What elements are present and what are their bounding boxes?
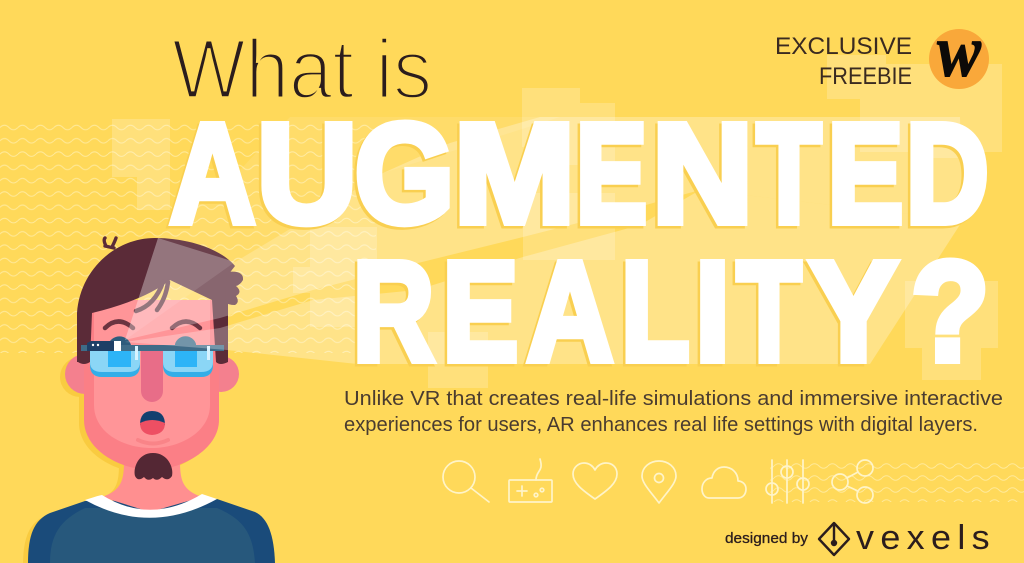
exclusive freebie text: FREEBIE	[819, 63, 912, 90]
heading: AUGMENTED: M	[454, 94, 575, 252]
headline shadow: T	[754, 96, 819, 254]
description text: Unlike VR that creates real-life simulations and immersive interactive	[344, 387, 1003, 410]
headline shadow: U	[254, 96, 354, 254]
headline shadow: A	[524, 234, 610, 392]
heading: AUGMENTED: E	[828, 94, 903, 252]
title: What is: What is	[172, 22, 432, 116]
headline shadow: N	[650, 96, 750, 254]
headline shadow: E	[825, 96, 901, 254]
heading: REALITY?: Y	[810, 232, 897, 390]
logo badge: w	[937, 11, 982, 93]
heading: AUGMENTED: T	[757, 94, 821, 252]
icon: gamepad	[509, 459, 552, 502]
heading: REALITY?: A	[527, 232, 613, 390]
icon: cloud	[702, 467, 746, 498]
exclusive freebie text: EXCLUSIVE	[775, 33, 912, 60]
heading: AUGMENTED: A	[170, 94, 255, 252]
headline shadow: M	[452, 96, 572, 254]
goatee	[135, 453, 172, 480]
nose	[141, 350, 163, 402]
icon row	[443, 459, 873, 503]
headline shadow: D	[904, 96, 986, 254]
headline shadow: Y	[807, 234, 895, 392]
face	[84, 300, 219, 470]
heading: REALITY?: I	[695, 232, 730, 390]
heading: REALITY?	[353, 232, 989, 390]
heading: AUGMENTED: U	[257, 94, 357, 252]
heading: AUGMENTED	[170, 94, 989, 252]
headline shadow: E	[574, 96, 644, 254]
icon: location pin	[642, 461, 676, 503]
heading: REALITY?: R	[353, 232, 434, 390]
shirt	[28, 499, 275, 563]
icon: sliders	[766, 460, 809, 503]
headline shadow: E	[440, 234, 516, 392]
headline shadow: T	[734, 234, 799, 392]
eyes	[108, 336, 196, 350]
description text: experiences for users, AR enhances real life settings with digital layers.	[344, 413, 978, 436]
hair	[77, 238, 243, 364]
person with smart glasses	[23, 238, 275, 563]
exclusive freebie text	[775, 33, 912, 90]
icon: heart	[573, 463, 617, 499]
collar	[85, 494, 217, 518]
designed by vexels logo: designed by	[725, 530, 809, 547]
headline shadow: G	[352, 96, 452, 254]
heading: AUGMENTED: E	[576, 94, 647, 252]
glasses	[81, 345, 224, 377]
designed by vexels logo: vexels	[856, 519, 996, 557]
headline shadow: I	[693, 234, 727, 392]
heading: AUGMENTED: G	[355, 94, 454, 252]
body shadow	[23, 303, 270, 563]
heading: REALITY?: T	[737, 232, 801, 390]
designed by vexels logo	[725, 519, 996, 557]
mouth	[140, 411, 165, 435]
pale floating squares	[112, 55, 1002, 388]
heading: REALITY?: E	[443, 232, 518, 390]
heading: AUGMENTED: D	[906, 94, 989, 252]
heading: REALITY?: ?	[911, 232, 989, 390]
icon: vexels diamond	[819, 523, 849, 555]
heading: AUGMENTED: N	[652, 94, 753, 252]
headline shadow	[168, 96, 986, 392]
headline shadow: A	[168, 96, 252, 254]
projection beam	[125, 117, 963, 364]
icon: magnifier	[443, 461, 489, 502]
icon: share nodes	[832, 460, 873, 503]
eyebrows	[105, 322, 200, 328]
heading: REALITY?: L	[621, 232, 689, 390]
chin shade	[138, 440, 168, 444]
headline shadow: R	[350, 234, 432, 392]
neck	[102, 460, 202, 512]
headline shadow: L	[619, 234, 687, 392]
ears	[65, 354, 239, 394]
AR device	[87, 341, 121, 351]
description text	[344, 387, 1003, 436]
